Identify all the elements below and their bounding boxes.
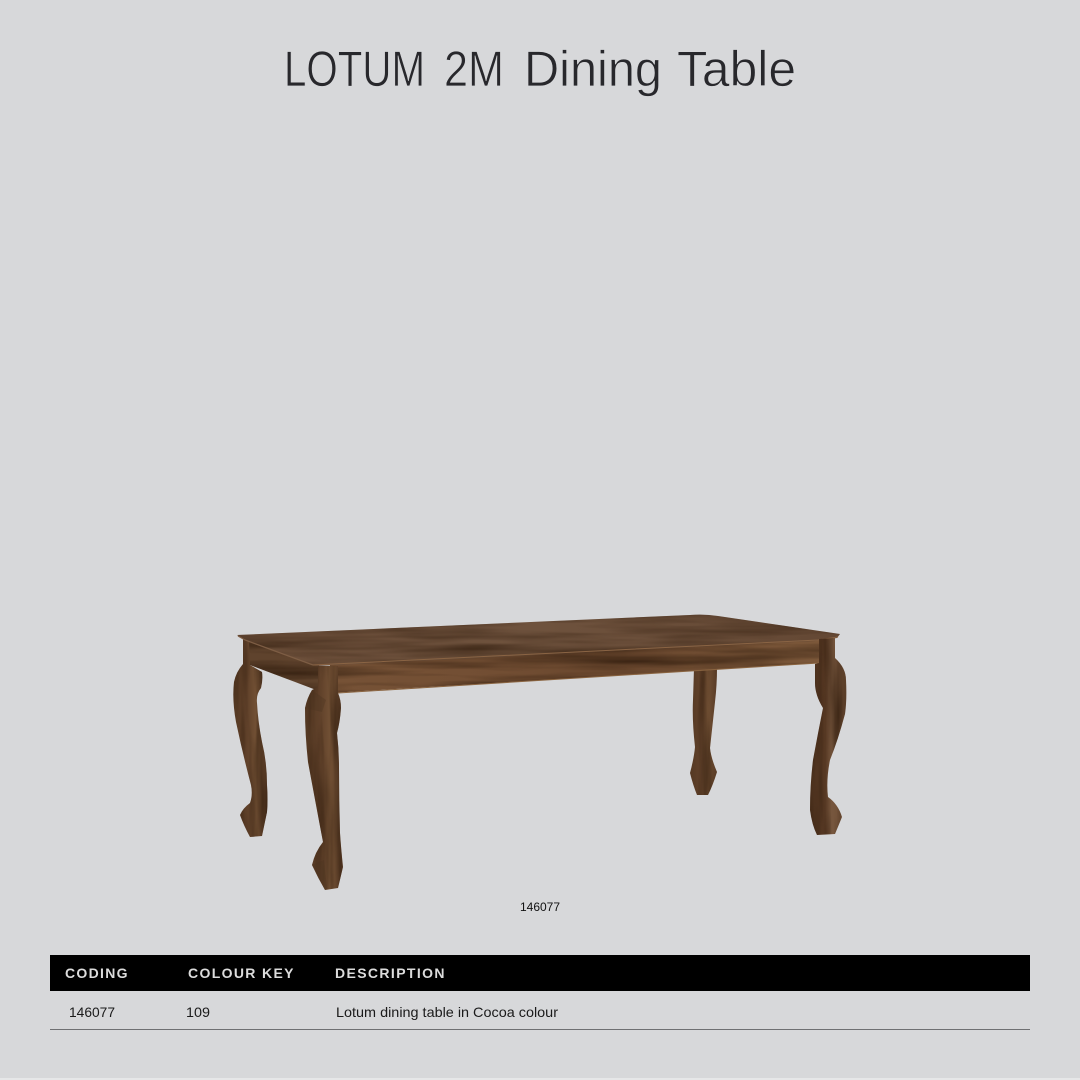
back right leg	[690, 668, 717, 795]
table header: DESCRIPTION	[335, 965, 446, 981]
left apron	[249, 640, 319, 691]
table header: CODING	[65, 965, 129, 981]
table	[50, 955, 1030, 1030]
right leg	[810, 638, 846, 835]
table header	[50, 955, 1030, 991]
product code caption: 146077	[520, 900, 560, 914]
table header: COLOUR KEY	[188, 965, 295, 981]
title	[284, 41, 796, 97]
front left leg shading	[305, 690, 327, 890]
front left leg	[305, 666, 343, 890]
table row: 109	[186, 1004, 210, 1020]
title: Table	[677, 41, 796, 97]
table row	[50, 1004, 1030, 1030]
tabletop	[237, 615, 840, 666]
table row: Lotum dining table in Cocoa colour	[336, 1004, 558, 1020]
front apron	[330, 638, 822, 693]
product image: dining table	[233, 615, 846, 890]
tabletop edge	[313, 637, 838, 665]
table row: 146077	[69, 1004, 115, 1020]
title: 2M	[444, 41, 504, 97]
back left leg	[233, 638, 268, 837]
title: Dining	[524, 41, 662, 97]
title: LOTUM	[284, 41, 425, 97]
